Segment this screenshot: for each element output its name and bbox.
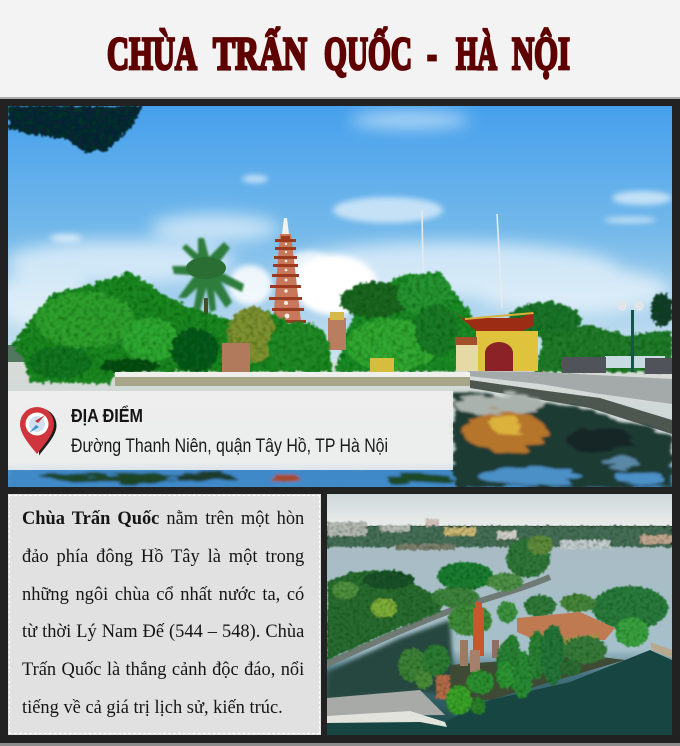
title: HÀ: [456, 28, 497, 80]
location overlay box: [8, 391, 453, 470]
gate tower and front trees: [436, 675, 485, 715]
description paragraph: tiếng về cả giá trị lịch sử, kiến trúc.: [22, 697, 283, 718]
waterfront path and wall: [327, 642, 672, 727]
title: NỘI: [512, 28, 570, 80]
clouds: [0, 112, 672, 328]
trees along causeway: [327, 535, 553, 660]
panel: aerial photo of the island temple: [327, 494, 672, 735]
lamp post: [617, 301, 644, 372]
title: [107, 26, 570, 80]
pagoda tower: [460, 602, 499, 672]
sky: [327, 494, 672, 526]
causeway: [327, 577, 550, 664]
island ground: [450, 655, 625, 700]
small tower behind trees: [328, 312, 346, 350]
location heading: ĐỊA ĐIỂM: [71, 405, 143, 426]
description paragraph: những ngôi chùa cổ nhất nước ta, có: [22, 584, 304, 605]
lake: [327, 545, 672, 735]
title: TRẤN: [213, 27, 307, 80]
island right trees: [448, 586, 668, 647]
tree branches top left: [8, 106, 143, 153]
cypress trees: [398, 625, 607, 699]
title: CHÙA: [107, 28, 197, 80]
reflection strip below the overlay: [8, 468, 454, 487]
temple roofs: [517, 612, 615, 660]
temple gate: [453, 311, 538, 371]
pagoda: [269, 218, 306, 323]
sky: [8, 106, 672, 376]
far shore city: [327, 519, 672, 550]
title: QUỐC: [324, 27, 412, 80]
description paragraph: Trấn Quốc là thắng cảnh độc đáo, nổi: [22, 659, 304, 680]
shrine and yellow wall: [222, 343, 394, 372]
description paragraph: [22, 508, 304, 718]
distant shore: [8, 345, 28, 363]
lagoon inside causeway: [327, 620, 455, 700]
parked vehicles: [562, 357, 672, 374]
icon: map pin with compass: [20, 407, 56, 456]
water: [8, 362, 672, 487]
title: -: [427, 28, 437, 80]
location address: Đường Thanh Niên, quận Tây Hồ, TP Hà Nội: [71, 436, 388, 457]
right trees: [335, 272, 673, 372]
dark lower lake: [327, 650, 672, 735]
description paragraph: từ thời Lý Nam Đế (544 – 548). Chùa: [22, 621, 304, 642]
water reflections: [453, 390, 672, 487]
panel: main photo of the pagoda by the lake: [8, 106, 672, 487]
panel: description text: [8, 494, 321, 735]
big tree left: [12, 272, 332, 384]
description paragraph: Chùa Trấn Quốc nằm trên một hòn: [22, 508, 304, 529]
flag poles: [422, 210, 502, 308]
header band with title: [0, 0, 680, 99]
description paragraph: đảo phía đông Hồ Tây là một trong: [22, 546, 304, 567]
distant lake on the right: [605, 356, 665, 368]
palm tree: [172, 238, 244, 372]
stone wall and embankment: [115, 371, 672, 434]
bottom edge: [0, 743, 680, 746]
